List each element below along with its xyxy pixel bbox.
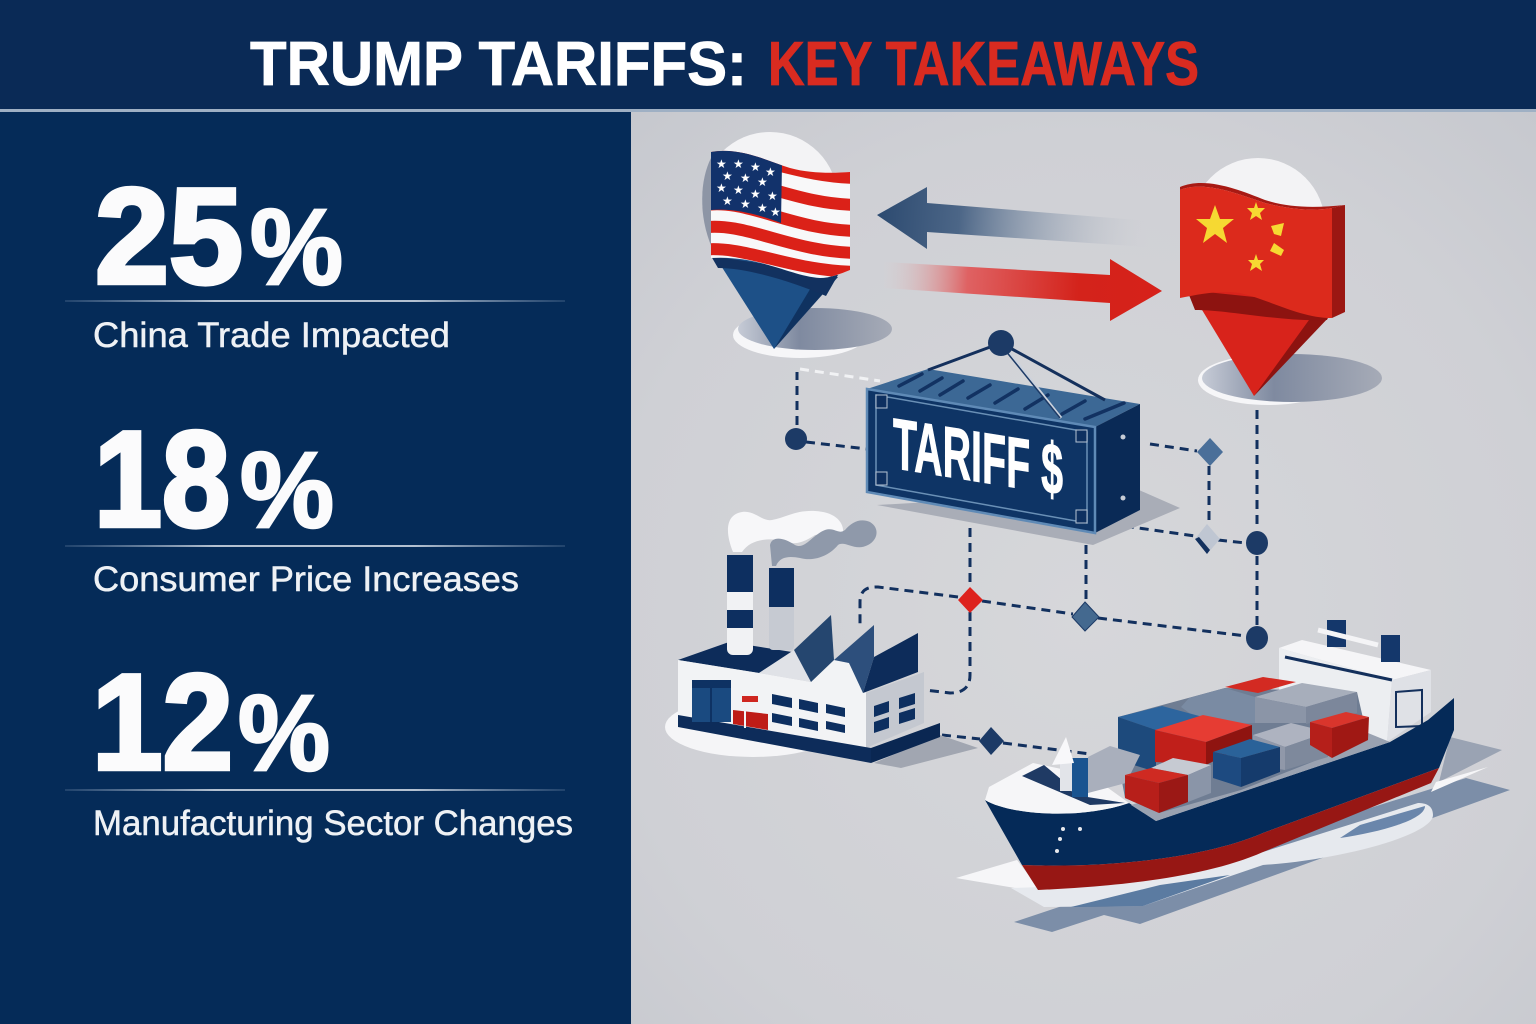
stat: 12 percent: Manufacturing Sector Changes xyxy=(93,804,573,843)
flag stars xyxy=(716,157,781,219)
door and red loading bay xyxy=(692,680,768,730)
flag stars: ★ xyxy=(765,165,776,179)
flag stars: ★ xyxy=(740,171,751,185)
arrow: China to USA xyxy=(877,187,1162,249)
flag stars: ★ xyxy=(740,197,751,211)
icon: tariff container: TARIFF $ xyxy=(893,403,1063,511)
icon: China flag map pin xyxy=(1180,158,1382,405)
title: TRUMP TARIFFS: xyxy=(250,30,747,99)
water shadows xyxy=(956,737,1510,932)
flag stars: ★ xyxy=(750,160,761,174)
superstructure xyxy=(1279,620,1431,742)
panel: statistics xyxy=(0,112,631,1024)
stat: 25 percent: China Trade Impacted xyxy=(93,316,450,355)
stat: 18 percent: % xyxy=(240,429,334,550)
arrow: USA to China xyxy=(884,259,1162,321)
flag stars: ★ xyxy=(757,175,768,189)
flag stars: ★ xyxy=(767,189,778,203)
stat: 18 percent xyxy=(65,403,565,599)
stat: 25 percent xyxy=(65,160,565,355)
flag stars: ★ xyxy=(722,194,733,208)
stat: 25 percent: 25 xyxy=(95,160,243,312)
stat: 12 percent xyxy=(65,646,573,843)
network nodes xyxy=(785,428,1268,755)
hull xyxy=(985,698,1454,866)
network dashed connectors xyxy=(797,369,1257,754)
bow deck xyxy=(985,763,1129,814)
stat: 18 percent: Consumer Price Increases xyxy=(93,560,519,599)
flag stars: ★ xyxy=(716,157,727,171)
icon: cargo ship xyxy=(956,620,1510,932)
flag stars: ★ xyxy=(716,181,727,195)
header rule xyxy=(0,109,1536,112)
icon: factory xyxy=(665,511,978,768)
hoist xyxy=(928,330,1105,418)
stat: 25 percent: % xyxy=(250,186,343,307)
flag stars: ★ xyxy=(757,201,768,215)
base plinth xyxy=(678,715,871,763)
flag stars: ★ xyxy=(722,169,733,183)
header bar xyxy=(0,0,1536,110)
factory windows xyxy=(772,693,915,733)
icon: US flag map pin xyxy=(700,132,892,358)
sawtooth roof xyxy=(794,615,918,693)
icon: tariff container xyxy=(867,330,1180,545)
smoke xyxy=(728,511,877,566)
flag stars: ★ xyxy=(750,187,761,201)
flag stars xyxy=(1196,202,1284,271)
stat: 12 percent: 12 xyxy=(92,646,233,798)
flag stars: ★ xyxy=(733,157,744,171)
panel: illustration background xyxy=(631,112,1536,1024)
stat: 18 percent: 18 xyxy=(94,403,230,555)
chimneys xyxy=(727,555,794,655)
portholes xyxy=(1055,827,1082,853)
stat: 12 percent: % xyxy=(238,672,330,793)
flag stars: ★ xyxy=(733,183,744,197)
flag stars: ★ xyxy=(770,205,781,219)
title: KEY TAKEAWAYS xyxy=(768,30,1199,99)
containers xyxy=(1052,677,1369,813)
